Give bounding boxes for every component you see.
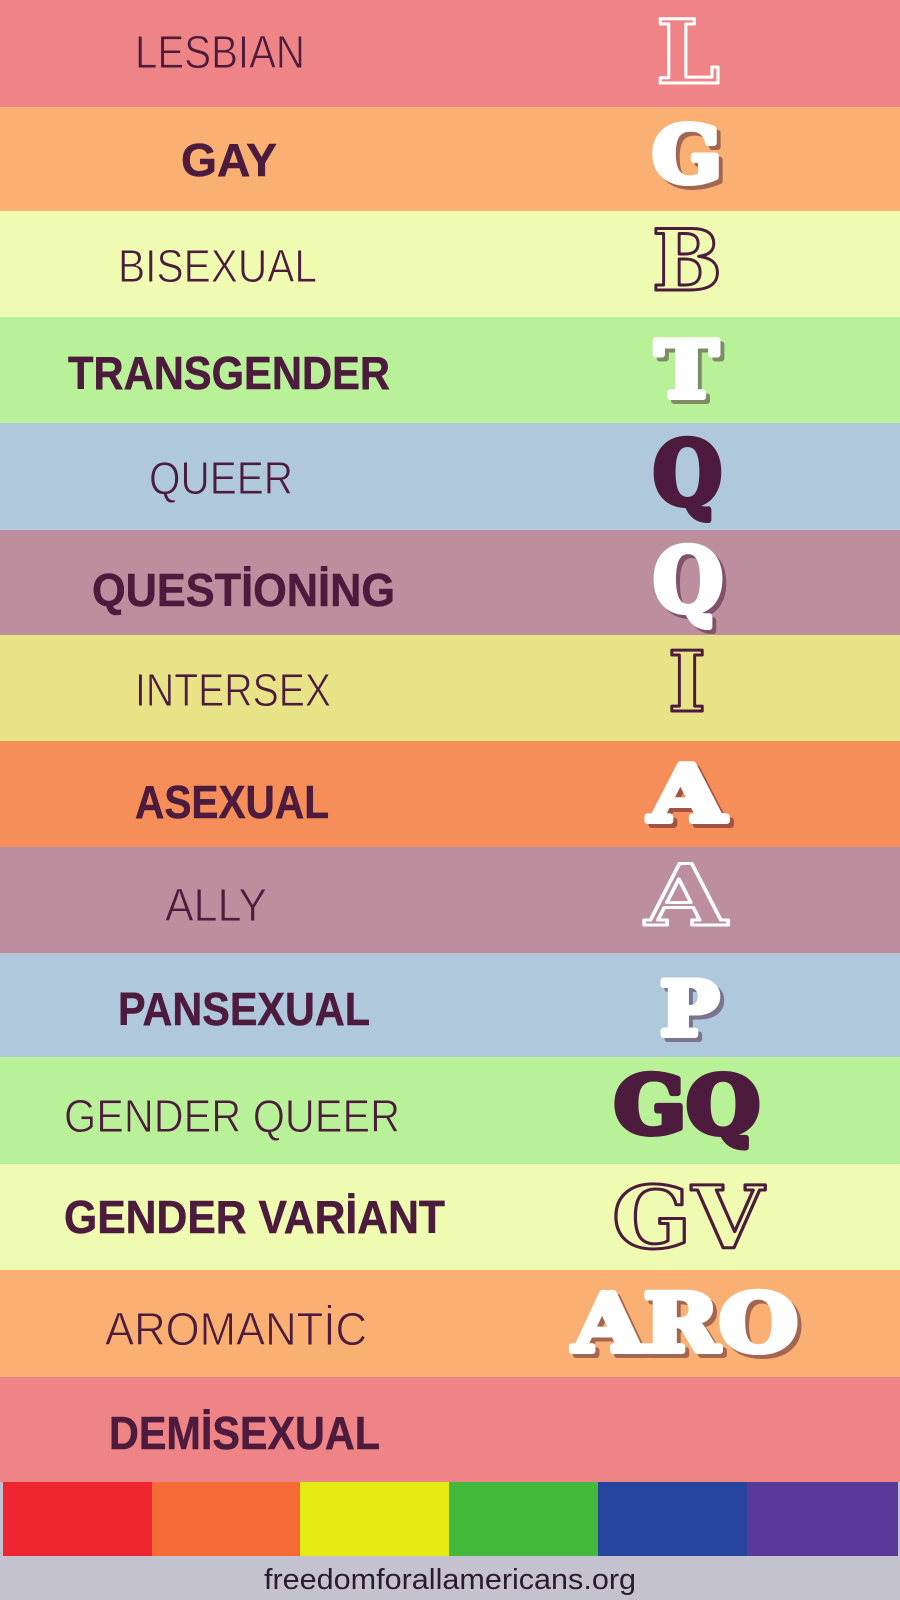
rainbow flag stripes — [3, 1482, 898, 1556]
panel: asexual row — [0, 741, 900, 847]
panel: aromantic row — [0, 1270, 900, 1377]
letter: A: A — [644, 846, 729, 945]
panel: footer — [0, 1482, 900, 1600]
letters: GQ: GQ — [614, 1058, 760, 1152]
letter: A: A — [648, 749, 727, 840]
label: asexual: ASEXUAL — [135, 776, 329, 828]
panel: lesbian row — [0, 0, 900, 107]
panel: ally row — [0, 846, 900, 953]
letter: G: G — [652, 110, 722, 201]
label: ally: ALLY — [165, 879, 267, 931]
label: transgender: TRANSGENDER — [68, 347, 390, 399]
panel: questioning row — [0, 528, 900, 635]
panel: bisexual row — [0, 211, 900, 317]
label: lesbian: LESBIAN — [135, 26, 305, 78]
label: questioning: QUESTİONİNG — [92, 564, 395, 616]
letters: ARO: ARO — [572, 1276, 798, 1370]
letters: GV: GV — [612, 1168, 765, 1269]
letter: P: P — [660, 965, 719, 1053]
letter: I: I — [668, 633, 706, 731]
panel: transgender row — [0, 317, 900, 423]
letter: T: T — [655, 325, 718, 416]
website url: freedomforallamericans.org — [264, 1564, 636, 1596]
letter: Q: Q — [653, 528, 723, 632]
label: demisexual: DEMİSEXUAL — [109, 1407, 380, 1459]
panel: intersex row — [0, 633, 900, 741]
label: pansexual: PANSEXUAL — [118, 983, 370, 1035]
panel: demisexual row — [0, 1377, 900, 1482]
label: bisexual: BISEXUAL — [118, 240, 317, 292]
label: queer: QUEER — [149, 452, 293, 504]
letter: B: B — [652, 211, 722, 310]
panel: pansexual row — [0, 953, 900, 1057]
panel: gender variant row — [0, 1164, 900, 1270]
panel: gay row — [0, 107, 900, 211]
panel: gender queer row — [0, 1057, 900, 1164]
letter: L: L — [656, 0, 720, 104]
label: gender variant: GENDER VARİANT — [64, 1191, 445, 1243]
letter: Q: Q — [653, 421, 722, 525]
label: aromantic: AROMANTİC — [105, 1303, 367, 1355]
label: intersex: INTERSEX — [135, 664, 331, 716]
label: gay: GAY — [181, 134, 277, 186]
panel: queer row — [0, 421, 900, 530]
label: gender queer: GENDER QUEER — [64, 1090, 400, 1142]
